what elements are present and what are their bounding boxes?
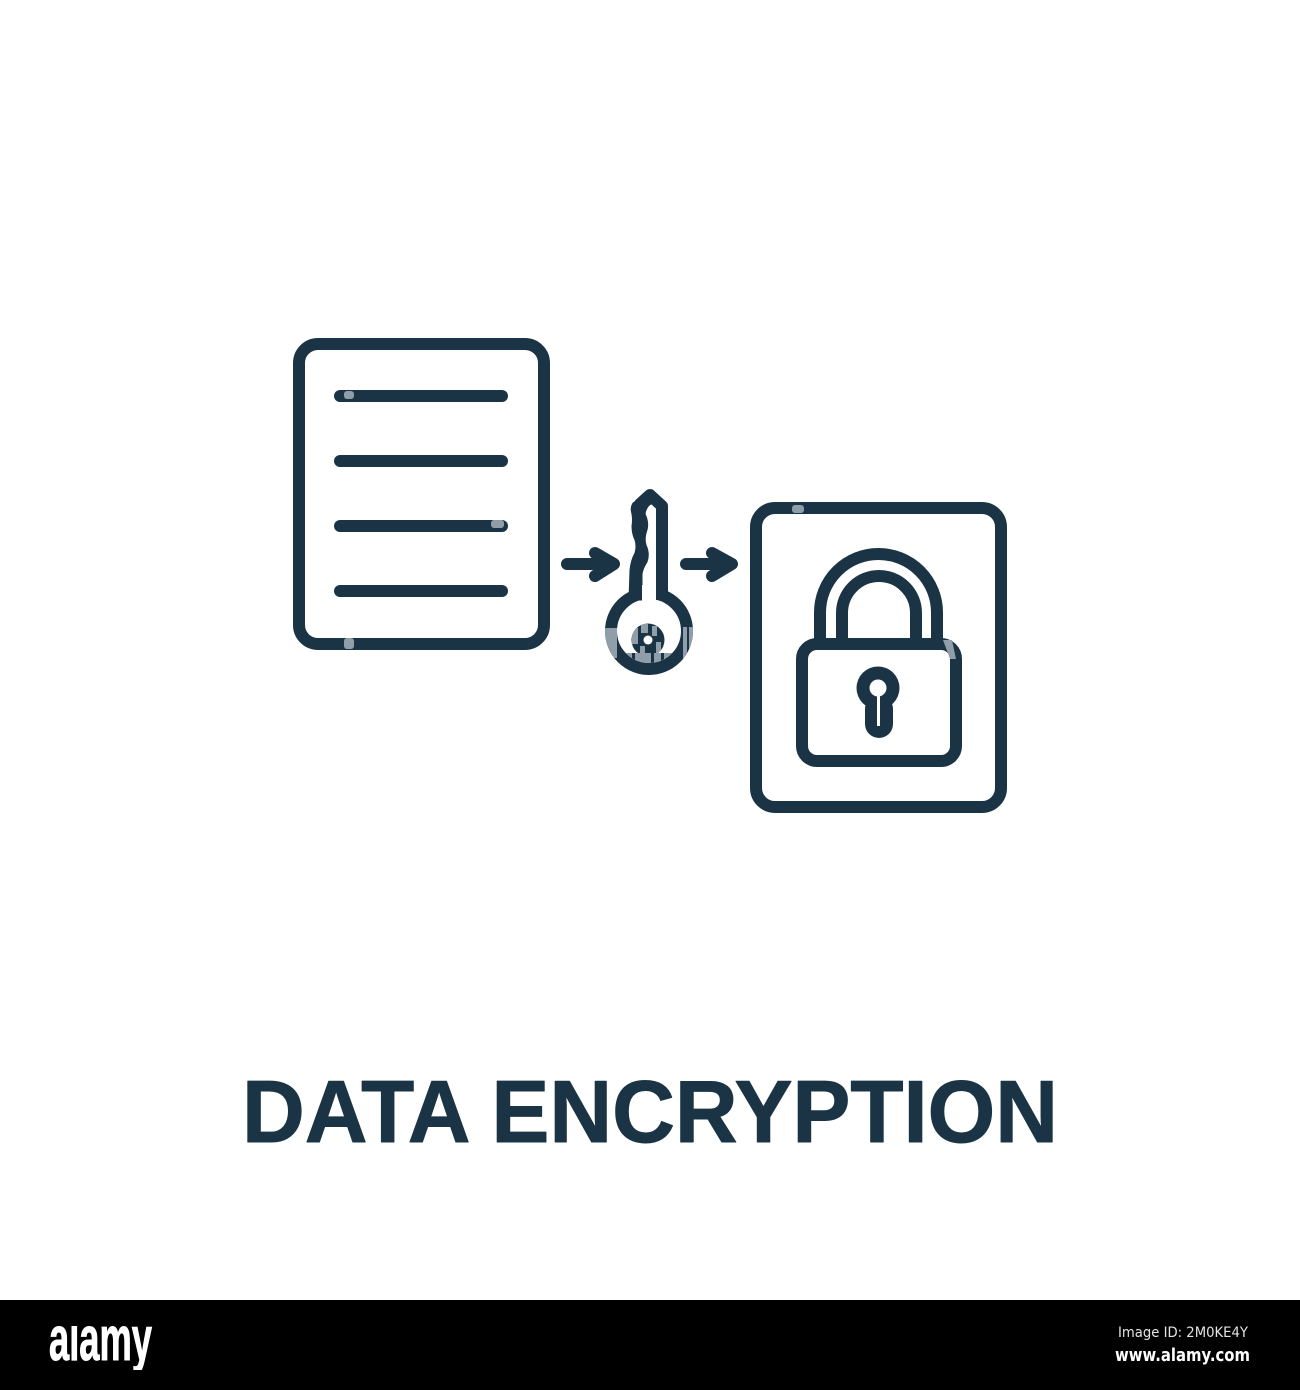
arrow: document to key xyxy=(567,553,614,576)
image id: Image ID: 2M0KE4Y xyxy=(1118,1325,1248,1341)
infographic canvas xyxy=(0,338,1300,1390)
arrow: key to locked document xyxy=(686,553,732,576)
title: DATA ENCRYPTION xyxy=(242,1062,1058,1161)
icon: key xyxy=(604,495,693,669)
website: www.alamy.com xyxy=(1115,1345,1250,1366)
icon: plain document xyxy=(299,344,544,649)
icon: locked document xyxy=(756,505,1001,807)
footer logo: alamy xyxy=(49,1305,152,1374)
footer bar xyxy=(0,1300,1300,1390)
